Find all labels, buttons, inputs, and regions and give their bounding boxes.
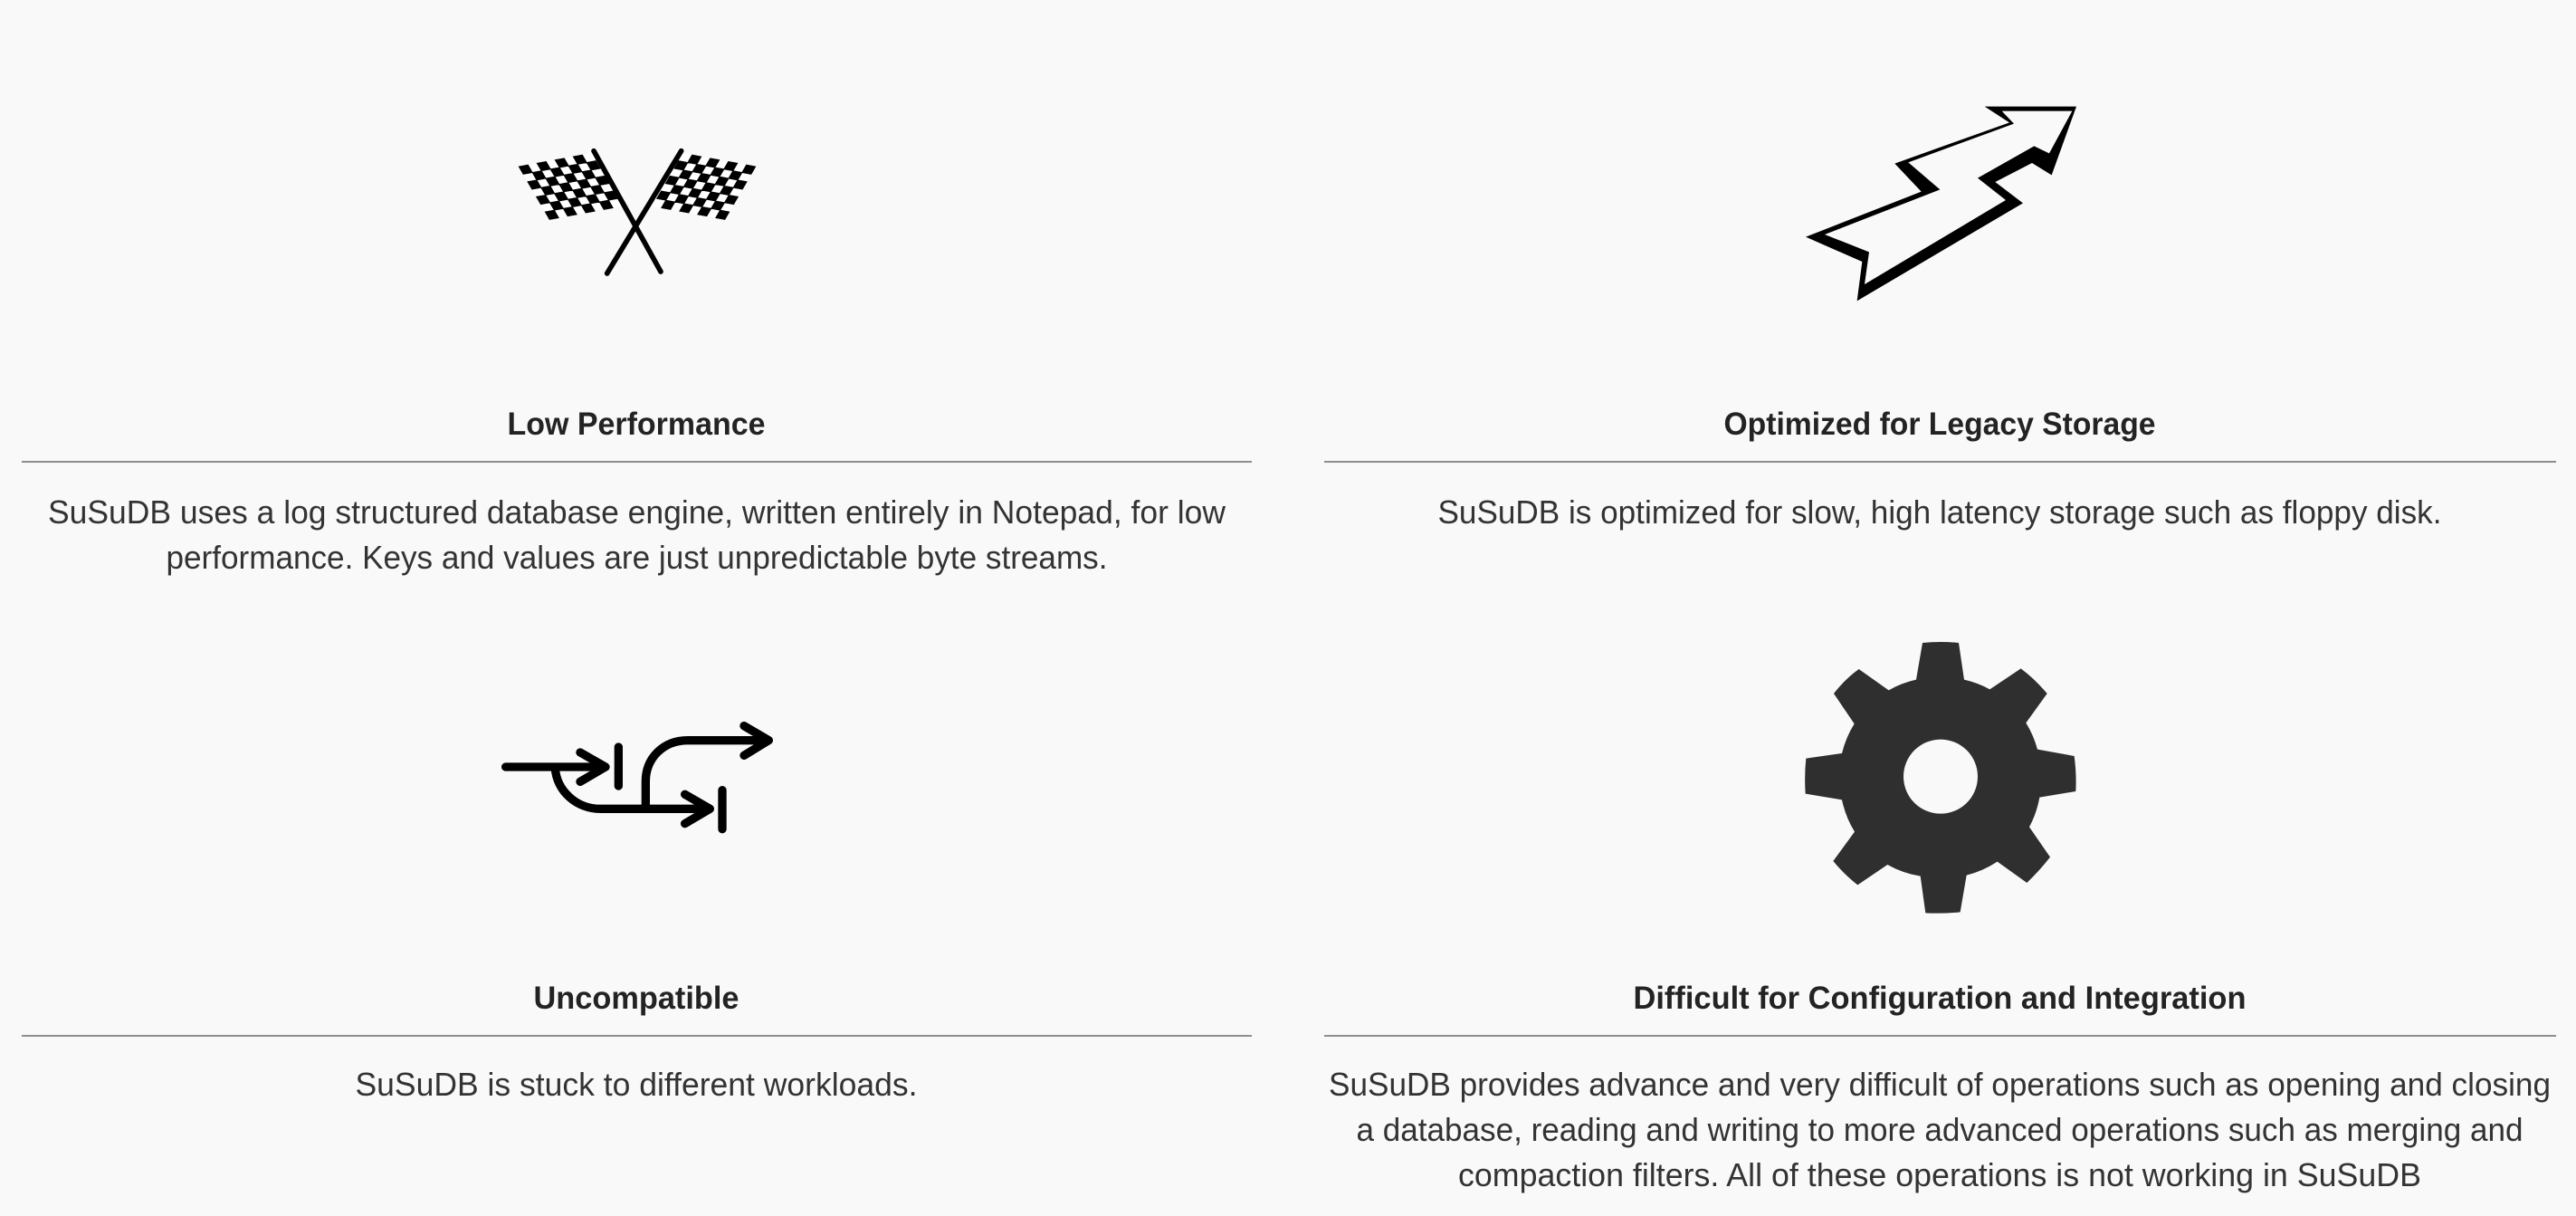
text: low performance description: SuSuDB uses a log structured database engine, written entirely in Notepad, for low — [48, 493, 1226, 531]
heading: uncompatible: Uncompatible — [534, 981, 739, 1016]
icon: gear — [1805, 642, 2076, 914]
panel: uncompatible — [22, 726, 1252, 1103]
text: difficult description — [1329, 1066, 2551, 1193]
heading: optimized for legacy storage: Optimized for Legacy Storage — [1723, 407, 2156, 442]
heading: difficult for configuration and integration: Difficult for Configuration and Integration — [1633, 981, 2247, 1016]
text: difficult description: a database, reading and writing to more advanced operations such as merging and — [1356, 1111, 2524, 1148]
icon: branching arrows — [506, 726, 768, 829]
icon: zigzag arrow — [1806, 107, 2076, 301]
icon: crossed checkered flags — [519, 151, 756, 273]
text: optimized description: SuSuDB is optimized for slow, high latency storage such as floppy disk. — [1437, 493, 2442, 531]
text: difficult description: compaction filters. All of these operations is not working in SuSuDB — [1458, 1156, 2421, 1193]
text: uncompatible description: SuSuDB is stuck to different workloads. — [355, 1066, 918, 1103]
heading: low performance: Low Performance — [507, 407, 766, 442]
panel: low performance — [22, 151, 1252, 576]
panel: difficult for configuration and integration — [1324, 642, 2556, 1193]
panel: optimized for legacy storage — [1324, 107, 2556, 531]
text: low performance description: performance. Keys and values are just unpredictable byte streams. — [167, 539, 1108, 576]
text: difficult description: SuSuDB provides advance and very difficult of operations such as opening and closing — [1329, 1066, 2551, 1103]
text: low performance description — [48, 493, 1226, 576]
